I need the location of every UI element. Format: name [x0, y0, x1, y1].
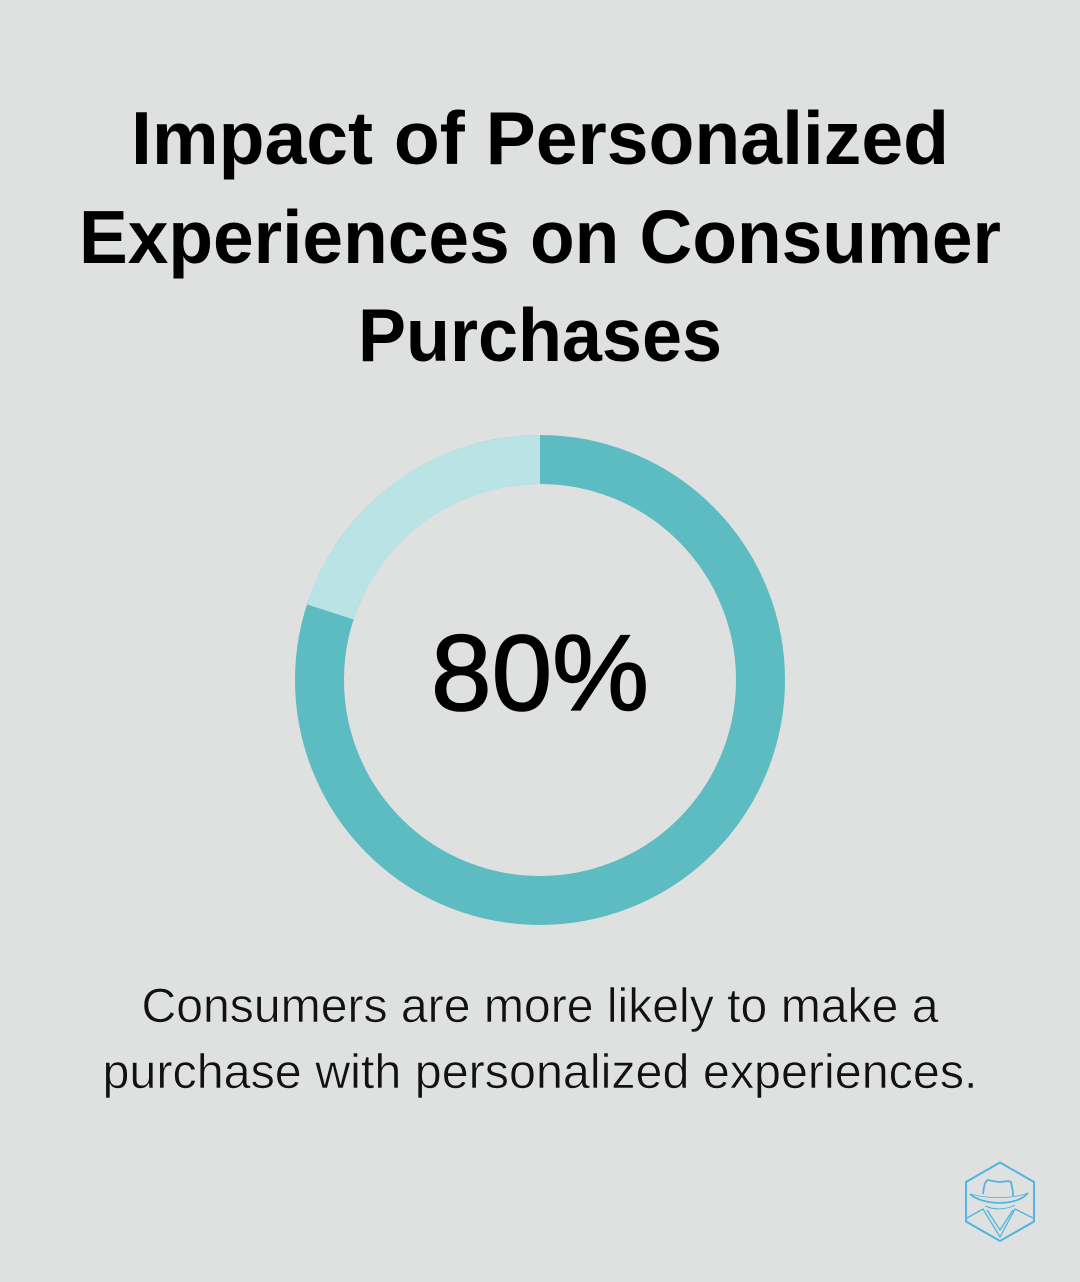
donut value: 80%	[431, 612, 649, 733]
title: Impact of Personalized	[131, 96, 949, 180]
title	[79, 96, 1001, 377]
description text	[102, 980, 978, 1099]
description text: Consumers are more likely to make a	[142, 980, 939, 1033]
title: Experiences on Consumer	[79, 195, 1001, 279]
donut chart: 80 percent	[320, 460, 760, 900]
title: Purchases	[358, 293, 722, 377]
icon: spy logo	[966, 1162, 1034, 1241]
description text: purchase with personalized experiences.	[102, 1046, 978, 1099]
